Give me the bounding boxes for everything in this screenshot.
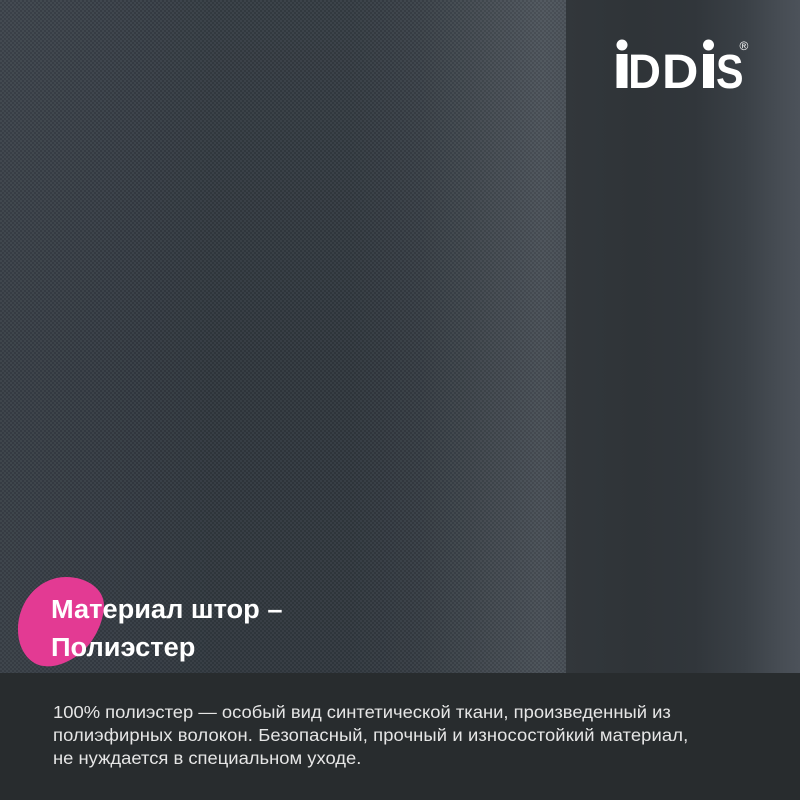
icon: pink blob accent bbox=[18, 577, 104, 666]
panel: curtain fabric right fold bbox=[566, 0, 800, 673]
panel: curtain fabric left fold bbox=[0, 0, 566, 673]
text block: description: 100% полиэстер — особый вид синтетической ткани, произведенный из bbox=[53, 702, 671, 722]
icon: IDDIS logo: S bbox=[716, 45, 744, 99]
text block: description: не нуждается в специальном уходе. bbox=[53, 748, 361, 768]
heading: Материал штор – bbox=[51, 596, 282, 624]
icon: IDDIS logo: D bbox=[662, 45, 698, 99]
text block: description: полиэфирных волокон. Безопасный, прочный и износостойкий материал, bbox=[53, 725, 688, 745]
heading: Полиэстер bbox=[51, 634, 195, 662]
icon: IDDIS logo: ® bbox=[740, 39, 748, 53]
icon: IDDIS logo: D bbox=[628, 45, 661, 98]
text block: description bbox=[53, 702, 688, 768]
heading bbox=[51, 596, 282, 662]
panel: description band bbox=[0, 673, 800, 800]
icon: IDDIS logo bbox=[616, 39, 748, 99]
